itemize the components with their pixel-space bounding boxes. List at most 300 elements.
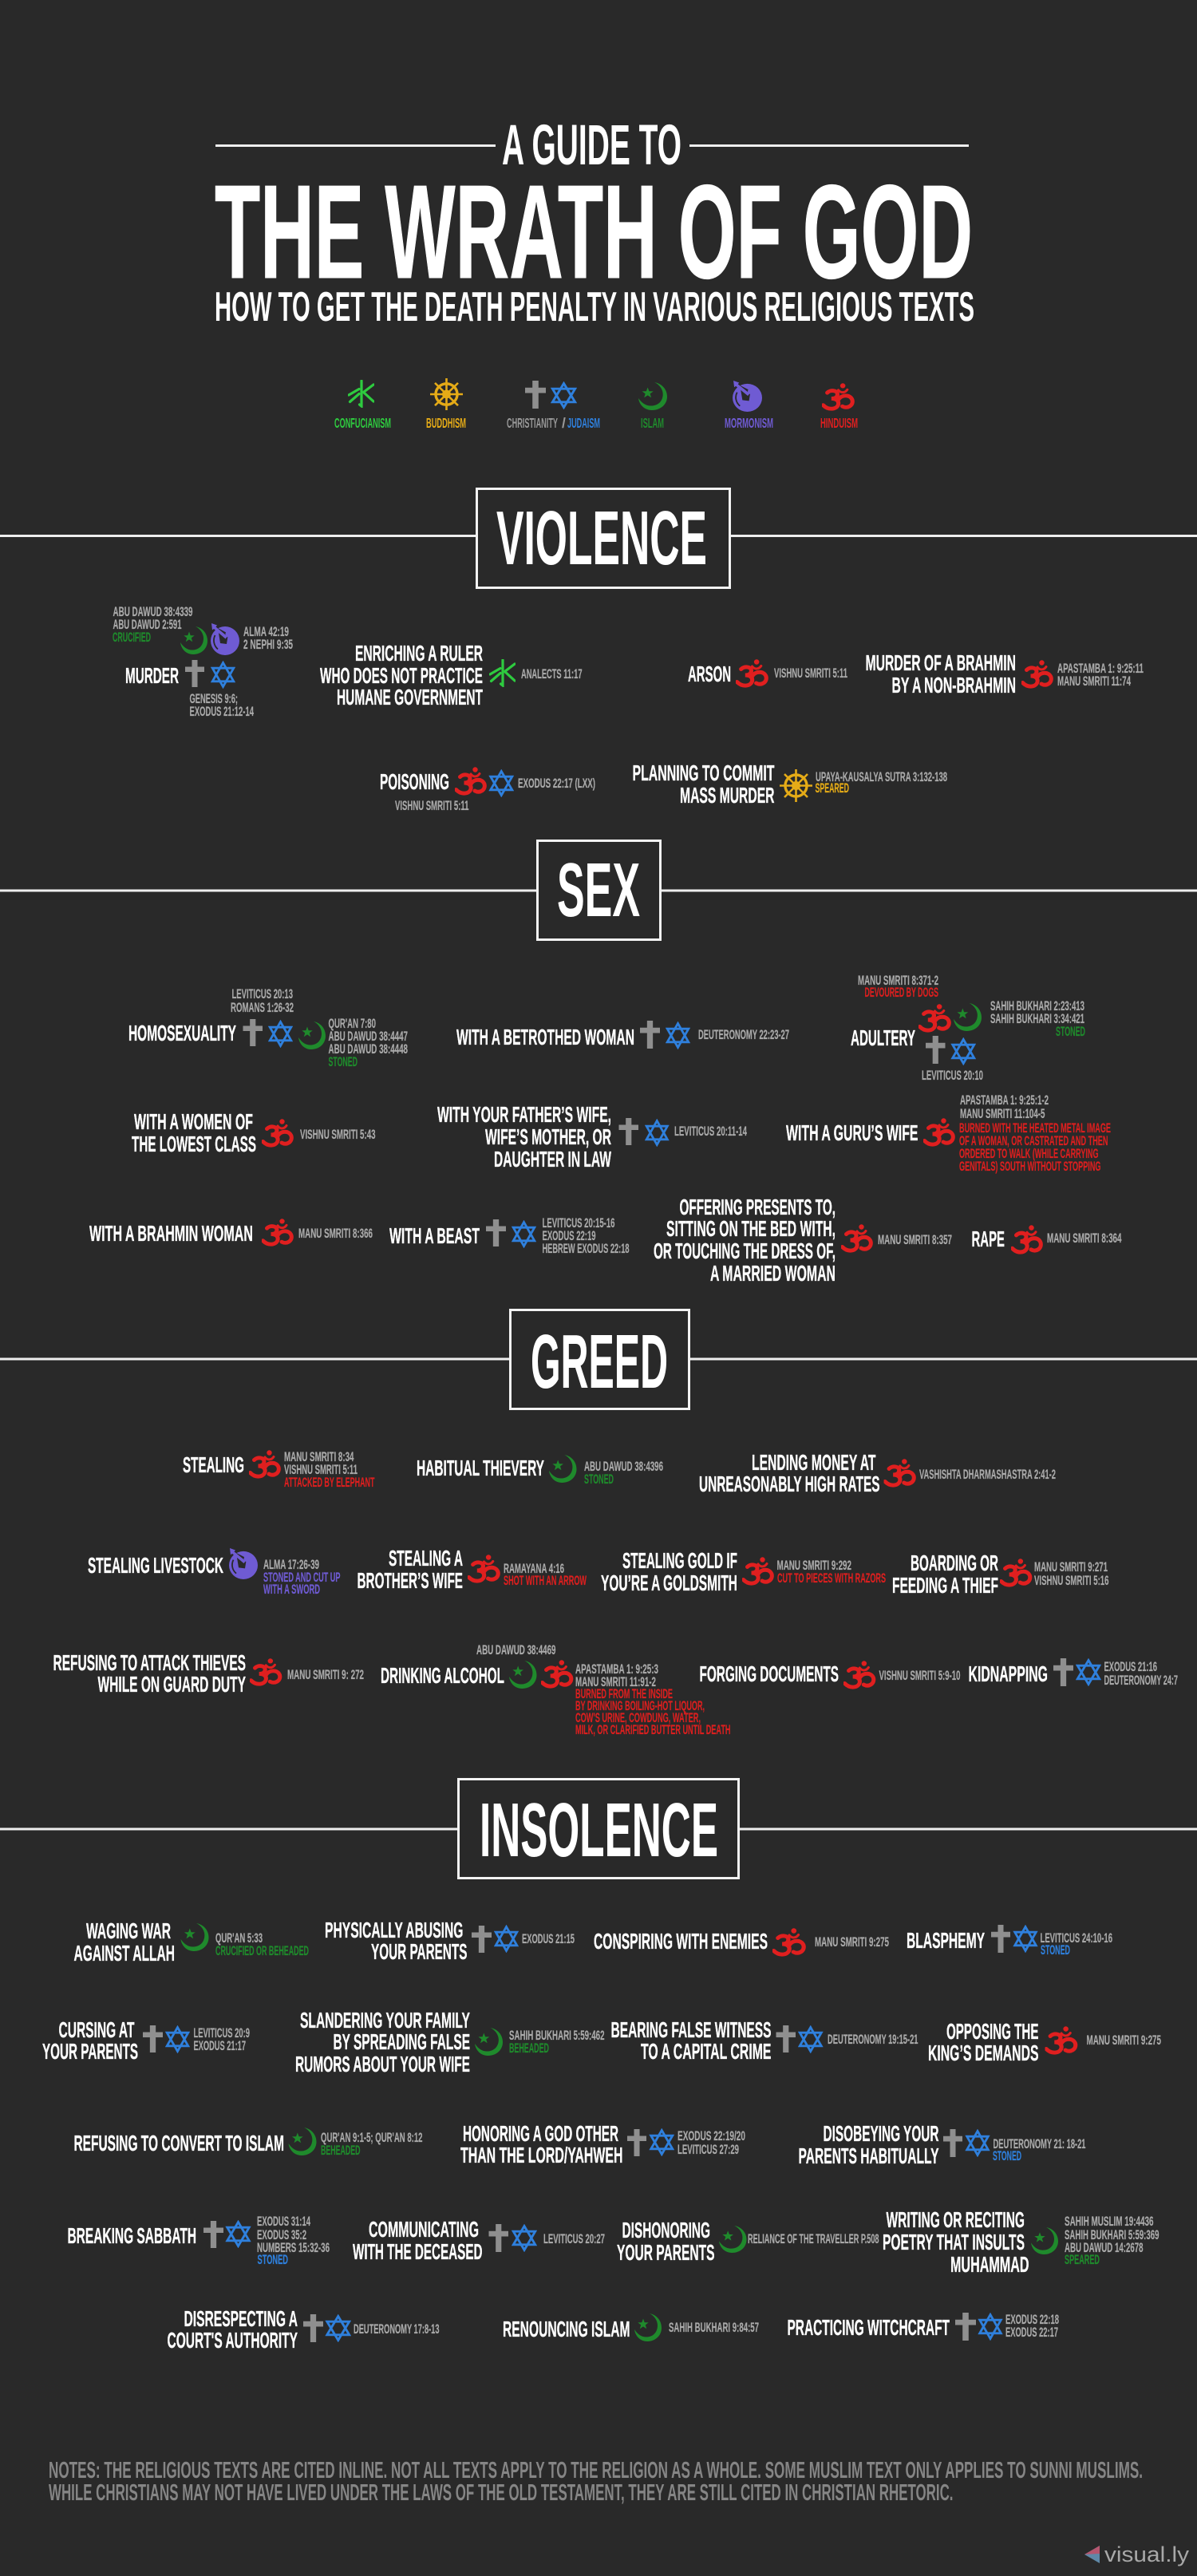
icon: cross (486, 1219, 506, 1247)
heading: PARENTS HABITUALLY (798, 2143, 939, 2168)
citations: Islam: SAHIH BUKHARI 2:23:413 (990, 999, 1084, 1013)
icon: cross (640, 1021, 660, 1049)
heading: WITH THE DECEASED (353, 2239, 482, 2264)
icon: star (667, 1023, 689, 1047)
legend: Christianity / Judaism (507, 381, 600, 431)
heading: WHO DOES NOT PRACTICE (320, 663, 483, 688)
heading (892, 1551, 998, 1598)
icon: om (543, 1660, 571, 1686)
legend: Islam (638, 382, 667, 431)
citation: UPAYA-KAUSALYA SUTRA 3:132-138 (816, 770, 947, 784)
citation: ABU DAWUD 38:4396 (584, 1460, 663, 1474)
citations: DEUTERONOMY 21: 18-21 (993, 2137, 1085, 2151)
heading: BREAKING SABBATH (67, 2223, 196, 2248)
icon: cross (926, 1036, 945, 1064)
heading: MASS MURDER (680, 783, 774, 808)
item: betrothed woman (456, 1021, 789, 1049)
citation: VISHNU SMRITI 5:43 (300, 1128, 375, 1142)
heading: BY SPREADING FALSE (334, 2029, 470, 2054)
icon: crescent (549, 1455, 576, 1483)
citations: Hindu: DEVOURED BY DOGS (865, 986, 938, 1000)
heading: AGAINST ALLAH (73, 1941, 175, 1966)
citations: Islam: ABU DAWUD 2:591 (113, 618, 182, 632)
citations: Bible (190, 692, 254, 719)
citations: Hindu (575, 1662, 731, 1737)
heading: HUMANE GOVERNMENT (337, 685, 483, 709)
heading: COMMUNICATING (369, 2217, 479, 2242)
icon: star (1077, 1660, 1100, 1684)
logo: visual.ly: visual.ly (1104, 2542, 1190, 2566)
heading (617, 2218, 715, 2265)
heading: MUHAMMAD (950, 2252, 1029, 2277)
citations: Mormon: 2 NEPHI 9:35 (243, 638, 293, 652)
heading: STEALING (183, 1452, 244, 1477)
heading: PLANNING TO COMMIT (632, 761, 774, 785)
icon: star (953, 1039, 974, 1063)
heading: TO A CAPITAL CRIME (641, 2039, 771, 2064)
citations: Islam: SAHIH BUKHARI 3:34:421 (990, 1012, 1084, 1026)
citation: STONED (584, 1472, 614, 1487)
heading: DISRESPECTING A (184, 2306, 298, 2331)
icon: star (227, 2222, 249, 2246)
item: rape (972, 1225, 1122, 1252)
item: slandering family (295, 2008, 605, 2076)
legend: Buddhism (426, 378, 466, 431)
icon: moroni (211, 623, 239, 655)
item: witchcraft (787, 2313, 1059, 2341)
citations: EXODUS 31:14 (257, 2214, 310, 2229)
section header: SEX (0, 841, 1197, 940)
citations: EXODUS 22:17 (LXX) (518, 776, 595, 791)
icon: om (920, 1004, 949, 1030)
citations: BEHEADED (509, 2041, 549, 2056)
icon: cross (619, 1118, 638, 1145)
citations (678, 2129, 745, 2157)
citations: Hindu: BY DRINKING BOILING-HOT LIQUOR, (575, 1699, 705, 1713)
citations: MANU SMRITI 9:271 (1034, 1560, 1108, 1574)
icon: star (651, 2131, 673, 2155)
citations: Bible (231, 987, 294, 1015)
citations: MANU SMRITI 8:34 (284, 1450, 354, 1464)
citations: EXODUS 21:17 (193, 2039, 246, 2053)
citations (257, 2214, 330, 2267)
citations: Islam (990, 999, 1085, 1039)
heading: YOUR PARENTS (42, 2039, 138, 2064)
citations (263, 1558, 340, 1597)
citations: EXODUS 22:19 (543, 1229, 595, 1243)
heading (611, 2017, 771, 2064)
icon: confucian (490, 660, 515, 685)
citation: EXODUS 21:15 (522, 1932, 575, 1946)
icon: cross (303, 2314, 323, 2342)
item: stealing gold (601, 1548, 886, 1595)
icon: cross (1053, 1658, 1073, 1686)
heading: OPPOSING THE (946, 2019, 1039, 2044)
item: disrespecting court (168, 2306, 439, 2353)
citations: Islam: ABU DAWUD 38:4339 (113, 605, 193, 619)
citation: MANU SMRITI 9:275 (815, 1935, 889, 1950)
item: poetry insulting Muhammad (883, 2207, 1159, 2277)
item: arson (688, 659, 847, 686)
citation: VISHNU SMRITI 5:9-10 (879, 1669, 961, 1683)
legend: Hinduism: HINDUISM (820, 415, 858, 431)
citations: STONED AND CUT UP (263, 1570, 340, 1585)
item: bearing false witness (611, 2017, 918, 2064)
heading: POISONING (380, 769, 449, 794)
section header: VIOLENCE (0, 488, 1197, 587)
citations (284, 1450, 375, 1490)
heading: PRACTICING WITCHCRAFT (787, 2315, 950, 2340)
heading (73, 1918, 175, 1966)
citation: DEUTERONOMY 19:15-21 (828, 2033, 918, 2047)
citations (193, 2026, 250, 2053)
item: communicating with the deceased (353, 2217, 605, 2264)
icon: crescent (298, 1021, 326, 1049)
citations (395, 776, 595, 813)
legend: Mormonism: MORMONISM (725, 415, 773, 431)
citation: Bible: LEVITICUS 20:10 (922, 1069, 983, 1083)
citations: HEBREW EXODUS 22:18 (543, 1242, 629, 1256)
citations: QUR'AN 5:33 (215, 1931, 263, 1946)
citations: Islam (113, 605, 193, 645)
heading: WIFE’S MOTHER, OR (485, 1124, 611, 1149)
icon: om (1046, 2026, 1076, 2053)
icon: crescent (719, 2226, 747, 2253)
heading: THAN THE LORD/YAHWEH (460, 2143, 622, 2167)
citation: Islam: ABU DAWUD 38:4469 (476, 1643, 555, 1657)
item: honoring another god (460, 2121, 745, 2167)
legend: Christianity / Judaism: CHRISTIANITY (507, 415, 558, 431)
citations: Hindu: MANU SMRITI 8:371-2 (858, 974, 938, 988)
icon: star (496, 1926, 517, 1950)
item: cursing at parents (42, 2017, 250, 2064)
section header: VIOLENCE: VIOLENCE (496, 496, 707, 581)
heading: STEALING LIVESTOCK (88, 1553, 223, 1578)
citations (1041, 1931, 1112, 1958)
icon: cross (776, 2025, 796, 2053)
heading: LENDING MONEY AT (752, 1450, 876, 1475)
legend: Christianity / Judaism: / (562, 415, 566, 431)
citations: Islam: ABU DAWUD 38:4447 (329, 1029, 408, 1044)
heading: BY A NON-BRAHMIN (892, 673, 1016, 697)
heading: THE LOWEST CLASS (132, 1132, 256, 1156)
icon: om (843, 1224, 871, 1250)
icon: star (1015, 1926, 1036, 1950)
footnotes (49, 2458, 1143, 2506)
citations: EXODUS 21:16 (1104, 1660, 1157, 1674)
citations: Mormon (243, 625, 293, 652)
title kicker: A GUIDE TO (502, 114, 681, 177)
heading: BEARING FALSE WITNESS (611, 2017, 771, 2042)
heading (132, 1109, 256, 1156)
citations: VISHNU SMRITI 5:11 (395, 799, 469, 813)
icon: om (1023, 660, 1051, 686)
citations: BEHEADED (321, 2143, 361, 2158)
citations: STONED (257, 2253, 288, 2267)
icon: cross (143, 2025, 163, 2053)
icon: om (1001, 1559, 1030, 1585)
icon: cross (627, 2129, 646, 2156)
section header: INSOLENCE (0, 1780, 1197, 1879)
icon: om (263, 1119, 291, 1145)
citations: Hindu: APASTAMBA 1: 9:25:3 (575, 1662, 658, 1677)
citations: EXODUS 22:19/20 (678, 2129, 745, 2143)
item: stealing (183, 1450, 375, 1490)
heading: FEEDING A THIEF (892, 1573, 998, 1598)
citations: ATTACKED BY ELEPHANT (284, 1476, 375, 1490)
title block (215, 114, 974, 330)
heading: KING’S DEMANDS (928, 2041, 1039, 2065)
item: father's wife (437, 1102, 747, 1171)
heading: CURSING AT (59, 2017, 134, 2042)
icon: om (263, 1219, 291, 1244)
citations: Hindu: COW'S URINE, COWDUNG, WATER, (575, 1711, 701, 1725)
heading (632, 761, 774, 808)
heading: SLANDERING YOUR FAMILY (300, 2008, 470, 2033)
icon: cross (955, 2313, 976, 2341)
citations: APASTAMBA 1: 9:25:1-2 (960, 1093, 1049, 1108)
icon: om (885, 1459, 914, 1485)
item: offering presents (654, 1195, 952, 1286)
citations: LEVITICUS 20:15-16 (543, 1216, 614, 1231)
icon: star (212, 662, 234, 686)
heading: UNREASONABLY HIGH RATES (699, 1472, 879, 1496)
legend: Islam: ISLAM (641, 415, 664, 431)
citations: Islam: STONED (1056, 1025, 1085, 1039)
icon: om (1012, 1225, 1041, 1252)
citation: DEUTERONOMY 17:8-13 (354, 2322, 439, 2337)
item: forging documents (699, 1661, 961, 1687)
citation: ANALECTS 11:17 (521, 667, 583, 682)
citations: Bible: ROMANS 1:26-32 (231, 1001, 294, 1015)
heading (295, 2008, 470, 2076)
citations: Bible: EXODUS 21:12-14 (190, 705, 254, 719)
item: conspiring (594, 1928, 889, 1954)
citations (1034, 1560, 1109, 1588)
citation: RELIANCE OF THE TRAVELLER P.508 (748, 2232, 879, 2246)
heading: CONSPIRING WITH ENEMIES (594, 1929, 768, 1954)
citations: SHOT WITH AN ARROW (504, 1574, 587, 1588)
citations: MANU SMRITI 11:74 (1057, 674, 1131, 689)
citations: Hindu: MANU SMRITI 11:91-2 (575, 1675, 656, 1689)
citations: ABU DAWUD 14:2678 (1065, 2241, 1143, 2255)
citations: EXODUS 35:2 (257, 2228, 306, 2242)
heading (865, 650, 1016, 697)
item: boarding a thief (892, 1551, 1109, 1598)
item: women of the lowest class (132, 1109, 375, 1156)
item: brother's wife (358, 1546, 587, 1593)
citations: MANU SMRITI 11:104-5 (960, 1107, 1045, 1121)
item: lending money (699, 1450, 1056, 1496)
icon: om (251, 1658, 280, 1684)
heading: MURDER OF A BRAHMIN (865, 650, 1016, 675)
item: brahmin woman (89, 1219, 373, 1246)
item: enriching a ruler (320, 641, 583, 709)
citations: Islam: STONED (329, 1055, 358, 1069)
heading: YOUR PARENTS (617, 2240, 715, 2265)
legend (334, 378, 858, 431)
citations: EXODUS 22:17 (1005, 2325, 1058, 2340)
heading (460, 2121, 622, 2167)
icon: om (251, 1450, 279, 1476)
citations: Islam: CRUCIFIED (113, 630, 151, 645)
citations: MANU SMRITI 9:292 (777, 1559, 851, 1573)
icon: om (744, 1557, 772, 1583)
item: murder (113, 605, 293, 719)
item: poisoning (380, 767, 595, 813)
citation: SPEARED (816, 781, 849, 796)
citations: QUR'AN 9:1-5; QUR'AN 8:12 (321, 2131, 423, 2145)
icon: om (845, 1661, 874, 1687)
heading: DRINKING ALCOHOL (381, 1663, 504, 1688)
heading (358, 1546, 463, 1593)
heading: DISOBEYING YOUR (824, 2121, 938, 2146)
citation: VASHISHTA DHARMASHASTRA 2:41-2 (919, 1468, 1056, 1482)
citation: MANU SMRITI 9: 272 (287, 1668, 364, 1682)
citations (993, 2137, 1085, 2163)
item: guru's wife (786, 1093, 1111, 1174)
heading: REFUSING TO ATTACK THIEVES (53, 1650, 246, 1675)
section header: INSOLENCE: INSOLENCE (480, 1788, 718, 1873)
icon: om (456, 767, 484, 793)
heading: WITH A BEAST (389, 1223, 480, 1248)
icon: crescent (634, 2313, 662, 2341)
citations (777, 1559, 886, 1586)
heading (437, 1102, 611, 1171)
heading (798, 2121, 939, 2168)
citations: Hindu (858, 974, 938, 1000)
citations: STONED (1041, 1943, 1070, 1958)
citations (1104, 1660, 1178, 1688)
citations: CRUCIFIED OR BEHEADED (215, 1944, 309, 1958)
citations: Mormon: ALMA 42:19 (243, 625, 289, 639)
icon: crescent (475, 2028, 503, 2056)
heading (928, 2019, 1039, 2065)
heading (325, 1918, 468, 1964)
heading: WAGING WAR (86, 1918, 171, 1943)
heading: YOUR PARENTS (371, 1939, 468, 1964)
heading (654, 1195, 836, 1286)
item: drinking alcohol (381, 1643, 731, 1737)
heading: ENRICHING A RULER (355, 641, 483, 666)
item: kidnapping (969, 1658, 1178, 1688)
legend: Confucianism (334, 381, 391, 431)
citation: DEUTERONOMY 22:23-27 (698, 1028, 789, 1042)
icon: star (491, 771, 512, 795)
heading: SITTING ON THE BED WITH, (666, 1216, 836, 1241)
icon: cross (943, 2129, 962, 2157)
citations: Islam (329, 1017, 408, 1069)
section header: GREED (0, 1310, 1197, 1409)
heading: FORGING DOCUMENTS (699, 1661, 839, 1686)
citations: Islam: QUR'AN 7:80 (329, 1017, 376, 1031)
heading (699, 1450, 879, 1496)
icon: om (469, 1555, 498, 1581)
citation: LEVITICUS 20:27 (543, 2232, 605, 2246)
heading: PHYSICALLY ABUSING (325, 1918, 463, 1942)
citations: VISHNU SMRITI 5:11 (284, 1463, 358, 1477)
heading: HOMOSEXUALITY (128, 1021, 236, 1045)
heading: OFFERING PRESENTS TO, (680, 1195, 836, 1219)
icon: star (327, 2316, 350, 2340)
icon: crescent (1031, 2227, 1058, 2254)
item: murder of a brahmin (865, 650, 1144, 697)
heading: RUMORS ABOUT YOUR WIFE (295, 2052, 470, 2076)
item: refusing to attack thieves (53, 1650, 364, 1697)
heading (42, 2017, 138, 2064)
legend: Mormonism (725, 381, 773, 431)
citations: Hindu: MILK, OR CLARIFIED BUTTER UNTIL DEATH (575, 1723, 731, 1737)
citations: STONED (993, 2149, 1021, 2163)
citations (543, 1216, 629, 1256)
heading: DISHONORING (622, 2218, 710, 2242)
heading: COURT'S AUTHORITY (168, 2328, 298, 2353)
heading: HABITUAL THIEVERY (417, 1456, 544, 1480)
heading (601, 1548, 737, 1595)
citation: VISHNU SMRITI 5:11 (774, 666, 847, 681)
heading (53, 1650, 246, 1697)
heading: ADULTERY (851, 1025, 915, 1050)
icon: cross (185, 660, 204, 687)
heading: STEALING GOLD IF (622, 1548, 737, 1573)
citations (1065, 2214, 1159, 2267)
icon: om (774, 1928, 804, 1954)
item: planning mass murder (632, 761, 947, 808)
item: blasphemy (907, 1925, 1112, 1958)
heading: HONORING A GOD OTHER (463, 2121, 618, 2146)
item: dishonoring parents (617, 2218, 879, 2265)
section header: SEX: SEX (557, 847, 640, 933)
heading: WRITING OR RECITING (886, 2207, 1025, 2232)
citations (509, 2029, 605, 2056)
heading: WITH A GURU’S WIFE (786, 1120, 918, 1145)
citations: ALMA 17:26-39 (263, 1558, 319, 1572)
citations: SPEARED (1065, 2253, 1100, 2267)
icon: wheel (780, 769, 812, 802)
citations: NUMBERS 15:32-36 (257, 2241, 330, 2255)
item: homosexuality (128, 987, 408, 1069)
legend: Hinduism (820, 383, 858, 431)
item: renouncing Islam (503, 2313, 759, 2341)
heading: KIDNAPPING (969, 1661, 1048, 1686)
item: stealing livestock (88, 1548, 340, 1597)
item: physically abusing parents (325, 1918, 575, 1964)
citations: RAMAYANA 4:16 (504, 1562, 564, 1576)
icon: star (513, 2226, 535, 2250)
icon: cross (243, 1019, 263, 1046)
heading: BLASPHEMY (907, 1928, 985, 1953)
heading: WITH A BRAHMIN WOMAN (89, 1221, 253, 1246)
heading: MURDER (125, 663, 179, 688)
heading: WHILE ON GUARD DUTY (97, 1672, 246, 1697)
icon: cross (203, 2221, 223, 2248)
legend: Confucianism: CONFUCIANISM (334, 415, 391, 431)
item: opposing the king (928, 2019, 1161, 2065)
icon: cross (991, 1925, 1010, 1953)
item: beast (389, 1216, 629, 1256)
legend: Christianity / Judaism: JUDAISM (567, 415, 600, 431)
item: breaking sabbath (67, 2214, 330, 2267)
icon: om (924, 1118, 953, 1144)
citation: SAHIH BUKHARI 9:84:57 (669, 2321, 759, 2335)
heading (320, 641, 483, 709)
heading: OR TOUCHING THE DRESS OF, (654, 1239, 836, 1263)
section header: GREED: GREED (531, 1319, 668, 1405)
heading: BROTHER’S WIFE (358, 1568, 463, 1593)
citations: LEVITICUS 20:9 (193, 2026, 250, 2041)
citation (584, 1460, 663, 1487)
citations (321, 2131, 423, 2158)
